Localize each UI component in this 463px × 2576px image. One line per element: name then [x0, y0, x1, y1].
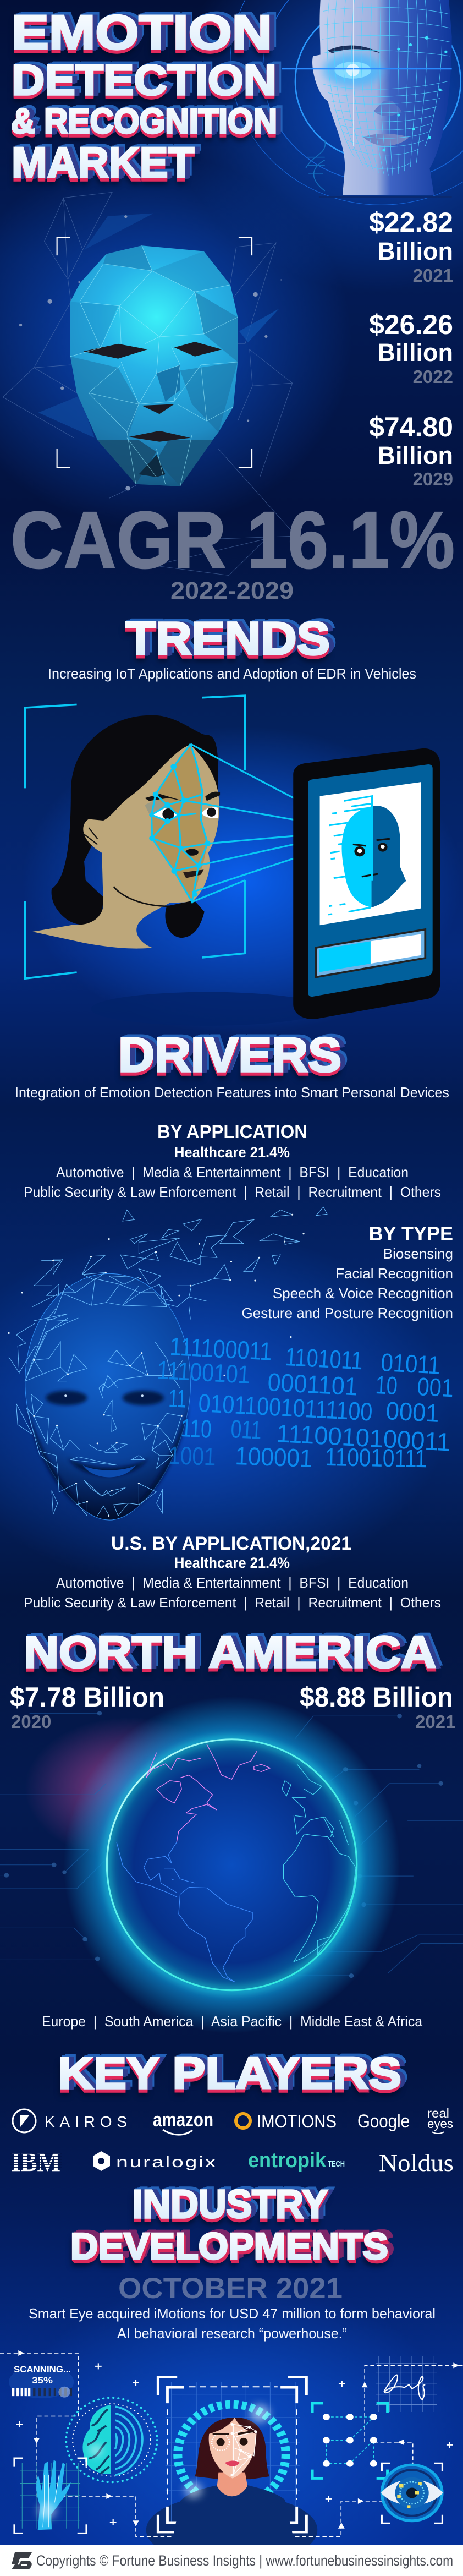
U.S. by application segment: Automotive | Media & Entertainment | BFSI | Education — [56, 1574, 409, 1591]
logo: Entropik Tech: TECH — [328, 2159, 345, 2169]
title: & RECOGNITION — [11, 101, 277, 141]
scanning progress bar — [9, 2365, 74, 2398]
binary digits: 100001 — [235, 1441, 313, 1473]
north america values: $7.78 Billion — [10, 1682, 164, 1713]
market values: $74.80 — [369, 412, 453, 442]
U.S. by application segment: U.S. BY APPLICATION,2021 — [111, 1533, 351, 1554]
CAGR figure: 2022-2029 — [170, 577, 294, 604]
by application segment: BY APPLICATION — [157, 1122, 307, 1142]
logo: realeyes: real — [427, 2106, 449, 2120]
binary digits: 111100011 — [169, 1332, 273, 1366]
title: MARKET — [12, 138, 194, 187]
binary digits: 001 — [416, 1372, 454, 1402]
binary digits — [156, 1332, 454, 1473]
north america values: $8.88 Billion — [300, 1682, 453, 1713]
by type segment: BY TYPE — [369, 1222, 453, 1245]
development date: OCTOBER 2021 — [118, 2272, 343, 2305]
regions list: Europe | South America | Asia Pacific | Middle East & Africa — [42, 2013, 423, 2030]
by type segment: Gesture and Posture Recognition — [242, 1305, 453, 1321]
node pattern — [312, 2403, 388, 2479]
heading: north america: NORTH AMERICA — [24, 1627, 436, 1677]
title: DETECTION — [12, 56, 277, 104]
development description: Smart Eye acquired iMotions for USD 47 million to form behavioral — [29, 2305, 436, 2322]
signature grid — [376, 2356, 437, 2412]
illustration: network face — [8, 1207, 327, 1520]
trends text: Increasing IoT Applications and Adoption of EDR in Vehicles — [48, 665, 416, 682]
binary digits: 0001101 — [267, 1368, 359, 1401]
logo: Google: Google — [357, 2111, 410, 2132]
north america values — [10, 1682, 455, 1732]
market values — [369, 207, 453, 489]
logo: NuraLogix — [93, 2151, 217, 2171]
footer bar — [0, 2545, 463, 2576]
logo: Entropik Tech: entropik — [248, 2149, 327, 2172]
title — [11, 5, 277, 187]
logo: amazon: amazon — [153, 2108, 213, 2131]
scanning ring — [178, 2404, 286, 2504]
illustration: low-poly blue face — [3, 192, 296, 576]
illustration: face scanned by tablet — [25, 696, 440, 1026]
illustration: biometric scanning — [0, 2350, 463, 2566]
by application segment: Healthcare 21.4% — [174, 1144, 290, 1161]
by type segment — [242, 1222, 453, 1321]
binary digits: 1101011 — [284, 1342, 363, 1375]
market values: $26.26 — [369, 309, 453, 340]
binary digits: 11 — [168, 1383, 187, 1413]
market values: Billion — [378, 441, 453, 469]
market values: 2022 — [413, 367, 453, 387]
U.S. by application segment — [24, 1533, 441, 1611]
heading: industry developments: DEVELOPMENTS — [70, 2225, 388, 2267]
market values: $22.82 — [369, 207, 453, 238]
binary digits: 11100101 — [156, 1355, 251, 1389]
market values: Billion — [378, 338, 453, 367]
hand scan — [14, 2458, 86, 2533]
market values: Billion — [378, 237, 453, 265]
title: EMOTION — [12, 5, 272, 59]
binary digits: 10 — [374, 1370, 398, 1400]
logo: realeyes: eyes — [427, 2116, 453, 2131]
binary digits: 110010111 — [325, 1442, 427, 1473]
binary digits: 010110010111100 — [197, 1388, 373, 1426]
logo: realeyes — [427, 2106, 453, 2134]
binary digits: 1110010100011 — [275, 1419, 451, 1457]
market values: 2021 — [413, 265, 453, 286]
U.S. by application segment: Healthcare 21.4% — [174, 1555, 290, 1571]
logo: Noldus: Noldus — [379, 2150, 454, 2176]
signature — [384, 2375, 425, 2400]
binary digits: 0001 — [385, 1396, 440, 1428]
binary digits: 1001 — [168, 1441, 216, 1471]
heading: industry developments — [70, 2183, 388, 2267]
center brackets — [158, 2377, 306, 2532]
north america values: 2020 — [11, 1711, 51, 1732]
logo: iMotions: IMOTIONS — [257, 2112, 337, 2131]
market values: 2029 — [413, 469, 453, 489]
by application segment — [24, 1122, 441, 1200]
by type segment: Facial Recognition — [335, 1265, 453, 1282]
development description: AI behavioral research “powerhouse.” — [117, 2325, 347, 2342]
by type segment: Biosensing — [383, 1245, 453, 1262]
U.S. by application segment: Public Security & Law Enforcement | Retail | Recruitment | Others — [24, 1594, 441, 1611]
brain and fingerprint — [66, 2398, 157, 2482]
heading: trends: TRENDS — [125, 612, 330, 664]
scanning text — [14, 2364, 71, 2386]
scanning text: 35% — [32, 2375, 53, 2386]
logo: IBM: IBM — [11, 2146, 60, 2177]
logo: Kairos — [13, 2109, 127, 2132]
binary digits: 110 — [180, 1413, 212, 1443]
binary digits: 011 — [230, 1414, 262, 1445]
logo: Kairos: KAIROS — [45, 2113, 127, 2130]
binary digits: 01011 — [380, 1348, 441, 1380]
logo: NuraLogix: nuralogix — [116, 2153, 217, 2170]
by type segment: Speech & Voice Recognition — [273, 1285, 453, 1301]
eye scan — [381, 2463, 443, 2523]
illustration: wireframe woman face — [230, 0, 463, 205]
woman with facial scan — [171, 2418, 295, 2546]
north america values: 2021 — [415, 1711, 455, 1732]
light glints — [38, 2404, 270, 2519]
drivers text: Integration of Emotion Detection Features into Smart Personal Devices — [15, 1084, 449, 1101]
development description — [29, 2305, 436, 2342]
heading: key players: KEY PLAYERS — [58, 2048, 401, 2098]
by application segment: Automotive | Media & Entertainment | BFSI | Education — [56, 1164, 409, 1180]
illustration: glowing globe — [0, 1697, 463, 2033]
scanning text: SCANNING... — [14, 2364, 71, 2375]
by application segment: Public Security & Law Enforcement | Retail | Recruitment | Others — [24, 1184, 441, 1200]
heading: industry developments: INDUSTRY — [132, 2183, 328, 2227]
heading: drivers: DRIVERS — [118, 1027, 341, 1082]
